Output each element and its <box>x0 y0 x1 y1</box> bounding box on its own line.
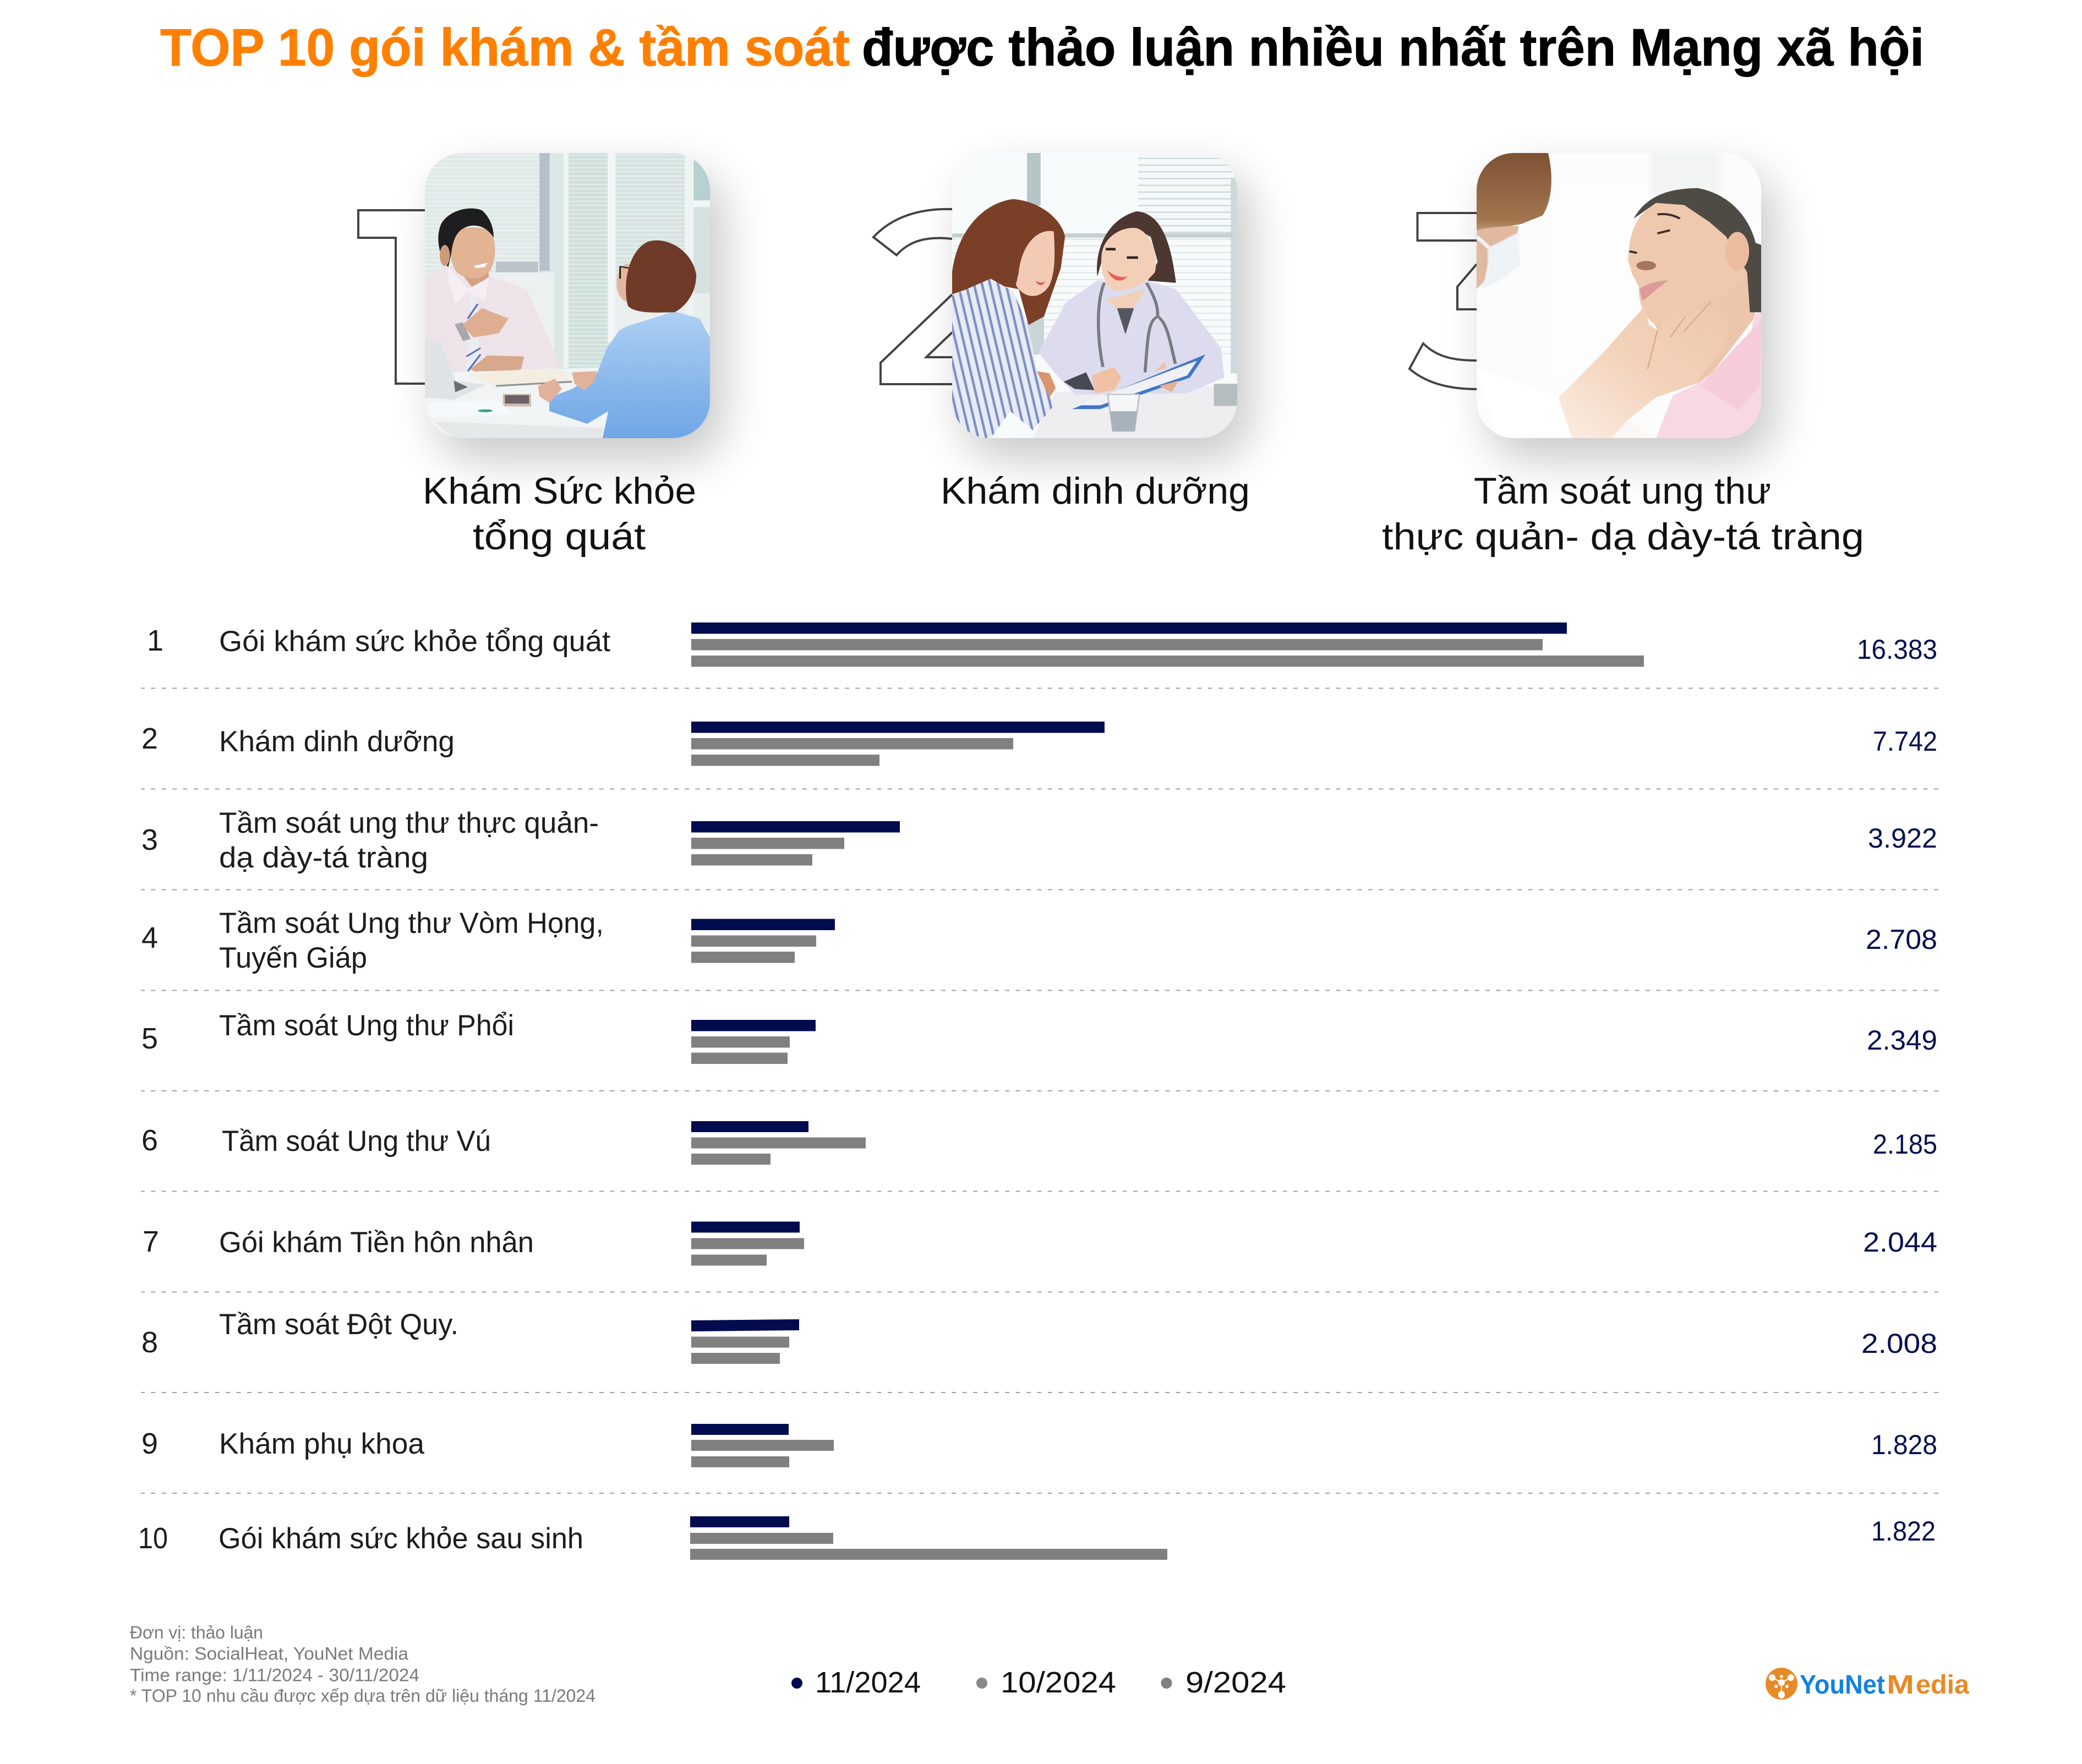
doctor <box>1477 153 1551 243</box>
row 6: Tầm soát Ung thư Vú <box>222 1125 491 1157</box>
caption 1: tổng quát <box>473 516 646 558</box>
title <box>160 18 1924 77</box>
outlined number 2 <box>873 209 952 384</box>
caption 3: thực quản- dạ dày-tá tràng <box>1382 516 1864 558</box>
row 6: 6 <box>141 1124 158 1157</box>
doctor <box>1039 281 1225 395</box>
patient <box>952 199 1065 325</box>
row 6: 2.185 <box>1873 1129 1937 1160</box>
title: TOP 10 gói khám & tầm soát <box>160 18 850 77</box>
row 9: 1.828 <box>1871 1429 1937 1460</box>
row 10: 10 <box>138 1522 168 1555</box>
photo 2: nutrition consultation <box>952 153 1237 438</box>
row 10: 1.822 <box>1871 1516 1936 1547</box>
source note: Đơn vị: thảo luận <box>130 1623 263 1642</box>
table <box>425 368 611 438</box>
row 8: 8 <box>141 1326 158 1359</box>
row 9: Khám phụ khoa <box>219 1428 425 1460</box>
row 4: 4 <box>141 921 158 954</box>
row 4: 2.708 <box>1866 924 1937 955</box>
woman <box>616 264 630 302</box>
row 2: 7.742 <box>1873 726 1937 757</box>
row 9 <box>141 1424 1937 1467</box>
logo: YouNet Media <box>1766 1668 1969 1700</box>
glass <box>1108 394 1139 431</box>
row 2: Khám dinh dưỡng <box>219 725 455 758</box>
source note: * TOP 10 nhu cầu được xếp dựa trên dữ liệu tháng 11/2024 <box>130 1686 595 1706</box>
caption 1 <box>423 470 696 558</box>
legend <box>791 1666 1286 1699</box>
source note <box>130 1623 595 1706</box>
row 8 <box>141 1308 1937 1364</box>
legend: 10/2024 <box>1001 1666 1116 1699</box>
row 6 <box>141 1121 1937 1165</box>
title: được thảo luận nhiều nhất trên Mạng xã hội <box>862 18 1924 77</box>
row 5: 5 <box>141 1022 158 1055</box>
photo 3: throat cancer screening <box>1477 153 1761 438</box>
row 4: Tuyến Giáp <box>219 942 367 974</box>
row 9: 9 <box>141 1427 158 1460</box>
row 3 <box>141 807 1937 874</box>
row 5: Tầm soát Ung thư Phổi <box>219 1009 514 1042</box>
outlined number 3 <box>1409 213 1477 389</box>
row 1 <box>147 622 1937 667</box>
row 7: 2.044 <box>1863 1227 1937 1258</box>
hands <box>1558 302 1732 438</box>
row 8: 2.008 <box>1861 1328 1937 1359</box>
caption 3 <box>1382 470 1864 558</box>
legend: 9/2024 <box>1185 1666 1286 1699</box>
logo: YouNet Media: edia <box>1916 1670 1969 1700</box>
row 4 <box>141 907 1937 974</box>
logo: YouNet Media: M <box>1887 1670 1914 1700</box>
row 7 <box>143 1222 1937 1266</box>
photo shadows <box>438 173 1774 458</box>
caption 2: Khám dinh dưỡng <box>941 470 1250 512</box>
man <box>425 267 560 372</box>
row 3: Tầm soát ung thư thực quản- <box>219 807 599 839</box>
row 8: Tầm soát Đột Quy. <box>219 1308 458 1341</box>
row 7: Gói khám Tiền hôn nhân <box>219 1226 534 1259</box>
row 2 <box>141 722 1937 766</box>
row 1: Gói khám sức khỏe tổng quát <box>219 625 610 658</box>
row 7: 7 <box>143 1225 159 1258</box>
row 1: 1 <box>147 624 163 657</box>
row 1: 16.383 <box>1857 634 1937 665</box>
source note: Nguồn: SocialHeat, YouNet Media <box>130 1643 408 1663</box>
caption 3: Tầm soát ung thư <box>1474 470 1771 512</box>
row 4: Tầm soát Ung thư Vòm Họng, <box>219 907 604 940</box>
photo 1: consultation with a doctor <box>425 153 710 438</box>
caption 1: Khám Sức khỏe <box>423 470 696 512</box>
legend: 11/2024 <box>815 1666 921 1699</box>
clipboard <box>1072 354 1205 409</box>
row 2: 2 <box>141 722 158 755</box>
row 3: 3.922 <box>1868 823 1937 854</box>
table <box>1032 385 1237 438</box>
source note: Time range: 1/11/2024 - 30/11/2024 <box>130 1665 419 1685</box>
row 5: 2.349 <box>1867 1025 1937 1056</box>
row 3: dạ dày-tá tràng <box>219 842 428 874</box>
row 3: 3 <box>141 823 158 856</box>
row 5 <box>141 1009 1937 1064</box>
row 10: Gói khám sức khỏe sau sinh <box>218 1522 583 1555</box>
row 10 <box>138 1516 1936 1560</box>
outlined number 1 <box>358 210 425 384</box>
logo: YouNet Media: YouNet <box>1800 1670 1885 1700</box>
patient <box>1645 264 1756 388</box>
